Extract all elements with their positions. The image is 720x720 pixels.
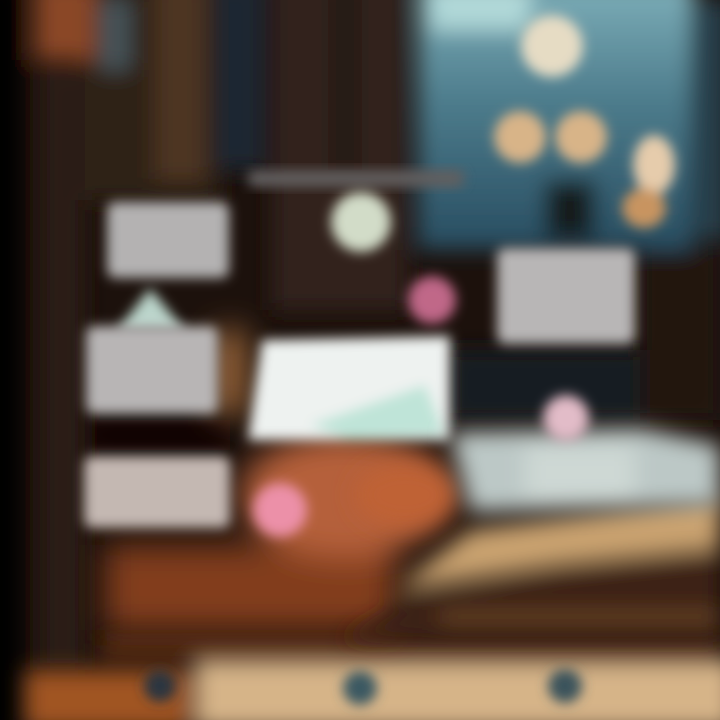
icon: pink marker right [543, 395, 589, 441]
icon: pink circle center [408, 276, 456, 324]
icon: peach circle left [494, 111, 546, 163]
orange sleeve and hand [105, 330, 450, 630]
icon: dark dot right [548, 669, 582, 703]
panel: lower right pale card [450, 428, 720, 512]
panel: top left card [107, 202, 229, 278]
hand highlight [355, 463, 455, 527]
icon: cream circle [521, 15, 583, 77]
panel: white chart card [248, 336, 450, 440]
icon: pale triangle marker [116, 288, 186, 332]
table surface [25, 640, 720, 720]
icon: pink circle lower [253, 483, 307, 537]
title bar [248, 170, 464, 187]
panel: top right card [497, 248, 635, 344]
panel: bottom left card [84, 456, 230, 528]
icon: peach oval [622, 135, 675, 228]
open book [340, 498, 720, 640]
icon: dark dot left [144, 670, 176, 702]
icon: green circle [331, 192, 391, 252]
icon: peach circle right [555, 111, 607, 163]
icon: dark dot center [343, 671, 377, 705]
panel: middle left card [86, 326, 218, 414]
